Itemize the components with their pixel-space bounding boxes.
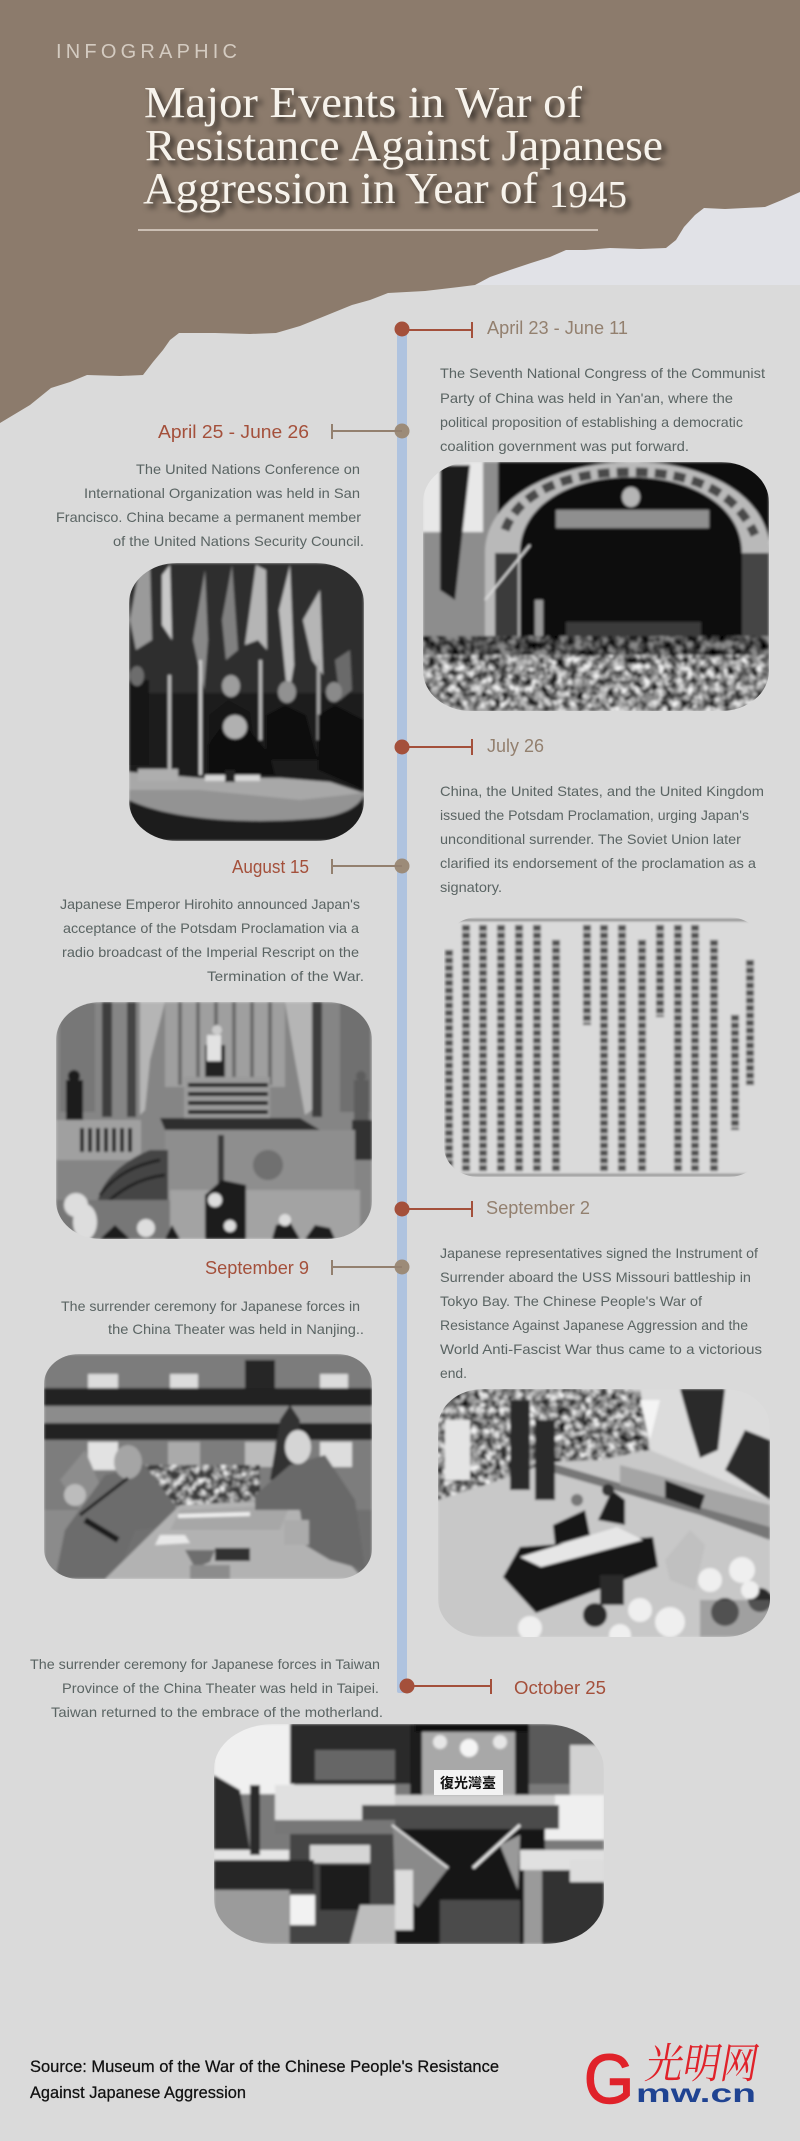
description: Party of China was held in Yan'an, where the <box>440 390 733 406</box>
description: The surrender ceremony for Japanese forces in <box>61 1298 360 1314</box>
connector <box>332 1260 410 1275</box>
connector <box>332 424 410 439</box>
photo: UN charter signing <box>129 563 364 841</box>
title <box>143 78 663 216</box>
event: October 25 <box>30 1656 606 1944</box>
description: Japanese representatives signed the Instrument of <box>440 1245 758 1261</box>
description <box>440 365 765 454</box>
photo: Potsdam Proclamation document <box>444 917 763 1177</box>
photo: USS Missouri signing <box>438 1389 772 1646</box>
description: radio broadcast of the Imperial Rescript on the <box>62 944 359 960</box>
title: Aggression in Year of <box>143 164 527 213</box>
event: April 23 - June 11 <box>394 318 770 711</box>
description: coalition government was put forward. <box>440 438 689 454</box>
logo: Guangming: 光明网 <box>642 2040 763 2087</box>
title: 1945 <box>549 174 627 216</box>
description: The United Nations Conference on <box>136 461 360 477</box>
description: The Seventh National Congress of the Communist <box>440 365 765 381</box>
source note: Against Japanese Aggression <box>30 2083 246 2102</box>
description <box>440 1245 762 1381</box>
header text <box>56 41 663 231</box>
photo sign <box>434 1770 503 1795</box>
date: September 9 <box>205 1258 309 1278</box>
light torn paper band <box>380 180 800 285</box>
date: October 25 <box>514 1678 606 1698</box>
photo: Taipei memorial gate <box>214 1724 604 1944</box>
description: signatory. <box>440 879 502 895</box>
connector <box>394 1201 472 1217</box>
description <box>30 1656 383 1720</box>
logo: Guangming <box>584 2040 763 2118</box>
photo sign: 復光灣臺 <box>440 1775 496 1791</box>
description: The surrender ceremony for Japanese forces in Taiwan <box>30 1656 380 1672</box>
event: July 26 <box>394 736 764 1177</box>
description: Termination of the War. <box>207 968 364 984</box>
description: World Anti-Fascist War thus came to a victorious <box>440 1341 762 1357</box>
description: acceptance of the Potsdam Proclamation via a <box>63 920 359 936</box>
description: Japanese Emperor Hirohito announced Japan's <box>60 896 360 912</box>
title: Major Events in War of <box>144 78 582 127</box>
description: issued the Potsdam Proclamation, urging Japan's <box>440 807 749 823</box>
connector <box>400 1678 491 1694</box>
description <box>440 783 764 895</box>
date: September 2 <box>486 1198 590 1218</box>
description <box>56 461 364 549</box>
description: Tokyo Bay. The Chinese People's War of <box>440 1293 702 1309</box>
description: clarified its endorsement of the proclamation as a <box>440 855 756 871</box>
photo: congress hall <box>423 462 770 711</box>
title underline <box>138 229 598 231</box>
source note <box>30 2057 499 2102</box>
description: the China Theater was held in Nanjing.. <box>108 1321 364 1337</box>
description: Surrender aboard the USS Missouri battleship in <box>440 1269 751 1285</box>
photo: imperial diet chamber <box>56 1002 372 1240</box>
connector <box>332 858 410 874</box>
logo: Guangming: mw.cn <box>636 2078 756 2108</box>
event: August 15 <box>56 857 410 1240</box>
description: unconditional surrender. The Soviet Union later <box>440 831 741 847</box>
connector <box>394 739 472 755</box>
photo: Nanjing surrender ceremony <box>44 1354 372 1579</box>
date: April 23 - June 11 <box>487 318 628 338</box>
description: Francisco. China became a permanent member <box>56 509 361 525</box>
connector <box>394 322 472 338</box>
title: Resistance Against Japanese <box>145 121 663 170</box>
kicker: INFOGRAPHIC <box>56 41 237 63</box>
header torn brown panel <box>0 0 800 423</box>
description: Province of the China Theater was held in Taipei. <box>62 1680 379 1696</box>
date: April 25 - June 26 <box>158 422 309 442</box>
date: August 15 <box>232 857 309 877</box>
date: July 26 <box>487 736 544 756</box>
logo: Guangming: G <box>584 2040 634 2118</box>
description: end. <box>440 1365 467 1381</box>
description: Resistance Against Japanese Aggression and the <box>440 1317 748 1333</box>
event: September 9 <box>44 1258 410 1579</box>
description: Taiwan returned to the embrace of the motherland. <box>51 1704 383 1720</box>
event: April 25 - June 26 <box>56 422 410 841</box>
description: International Organization was held in San <box>84 485 360 501</box>
description: of the United Nations Security Council. <box>113 533 364 549</box>
description: China, the United States, and the United Kingdom <box>440 783 764 799</box>
description <box>60 896 364 984</box>
source note: Source: Museum of the War of the Chinese People's Resistance <box>30 2057 499 2076</box>
event: September 2 <box>394 1198 772 1646</box>
description <box>61 1298 364 1337</box>
timeline spine <box>397 330 407 1693</box>
description: political proposition of establishing a democratic <box>440 414 743 430</box>
